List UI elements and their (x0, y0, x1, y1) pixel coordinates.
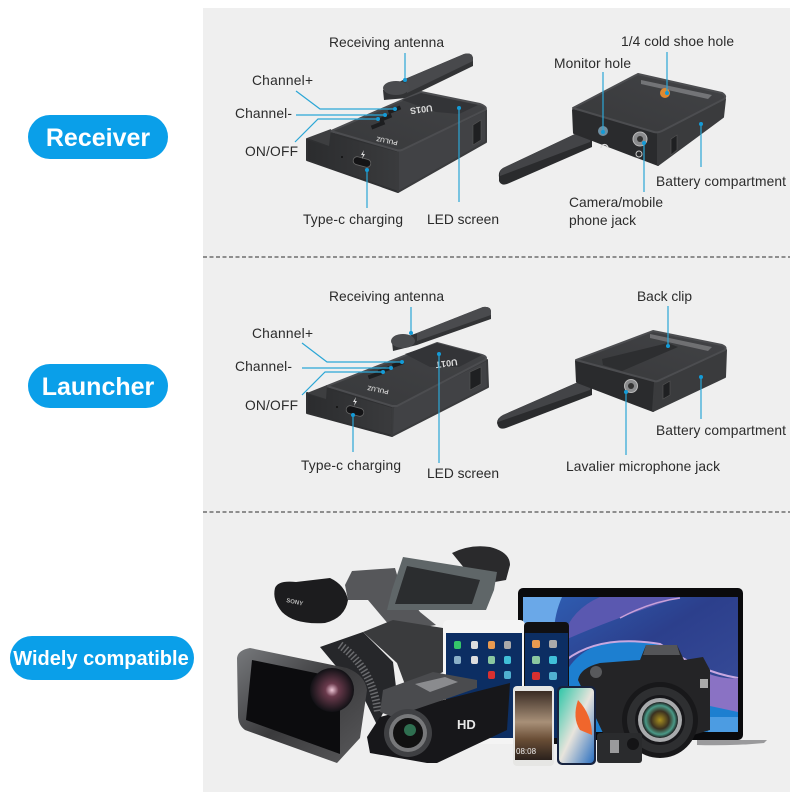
launcher labels: Back clip (637, 289, 692, 304)
pill: Widely compatible: Widely compatible (13, 648, 189, 670)
pill: Receiver (28, 115, 168, 159)
receiver front device: U01S (409, 103, 433, 116)
camera body (363, 620, 443, 690)
launcher labels: Lavalier microphone jack (566, 459, 720, 474)
eyepiece (452, 546, 510, 585)
receiver labels: Monitor hole (554, 56, 631, 71)
receiver labels: Receiving antenna (329, 35, 444, 50)
iPhone (557, 686, 596, 765)
receiver front device (307, 54, 486, 192)
professional video camera: SONY (286, 598, 303, 607)
launcher labels: Receiving antenna (329, 289, 444, 304)
receiver labels: Channel- (235, 106, 292, 121)
HD camcorder (367, 672, 510, 763)
HD camcorder: HD (457, 717, 476, 732)
flip screen (387, 557, 497, 610)
launcher labels: Battery compartment (656, 423, 786, 438)
rear antenna (497, 383, 592, 429)
pill: Widely compatible (10, 636, 194, 680)
pill: Launcher (28, 364, 168, 408)
launcher labels (235, 289, 786, 481)
lens hood (237, 648, 367, 763)
leader lines and callout dots (295, 52, 703, 463)
receiver labels: Battery compartment (656, 174, 786, 189)
handle and arm (345, 568, 436, 632)
microphone (274, 578, 348, 623)
receiver labels: phone jack (569, 213, 636, 228)
receiver antenna (383, 54, 473, 100)
professional video camera (237, 546, 510, 763)
pill: Launcher: Launcher (42, 373, 155, 401)
receiver labels: ON/OFF (245, 144, 298, 159)
launcher antenna (391, 307, 491, 351)
launcher front device: U01T (434, 357, 458, 370)
receiver labels: Camera/mobile (569, 195, 663, 210)
receiver labels: Channel+ (252, 73, 313, 88)
laptop (518, 588, 767, 745)
lens ribs (340, 645, 378, 712)
launcher labels: Channel+ (252, 326, 313, 341)
lens barrel (320, 632, 396, 725)
receiver labels: Type-c charging (303, 212, 403, 227)
pill: Receiver: Receiver (46, 124, 150, 152)
Huawei phone (513, 686, 554, 766)
receiver labels: LED screen (427, 212, 499, 227)
launcher labels: ON/OFF (245, 398, 298, 413)
black tablet (524, 622, 569, 744)
launcher front device: PULUZ (367, 384, 389, 395)
receiver rear device (499, 74, 725, 185)
launcher rear device (497, 331, 726, 429)
launcher front device (307, 307, 491, 436)
DSLR camera (578, 645, 710, 758)
launcher labels: LED screen (427, 466, 499, 481)
launcher labels: Type-c charging (301, 458, 401, 473)
white tablet (443, 620, 525, 744)
launcher labels: Channel- (235, 359, 292, 374)
receiver labels: 1/4 cold shoe hole (621, 34, 734, 49)
receiver front device: PULUZ (376, 135, 398, 146)
action camera (597, 733, 642, 763)
grey background panel (203, 8, 790, 792)
compatible devices group (237, 546, 767, 766)
rear antenna (499, 134, 592, 185)
Huawei phone: 08:08 (516, 747, 537, 756)
receiver labels (235, 34, 786, 228)
